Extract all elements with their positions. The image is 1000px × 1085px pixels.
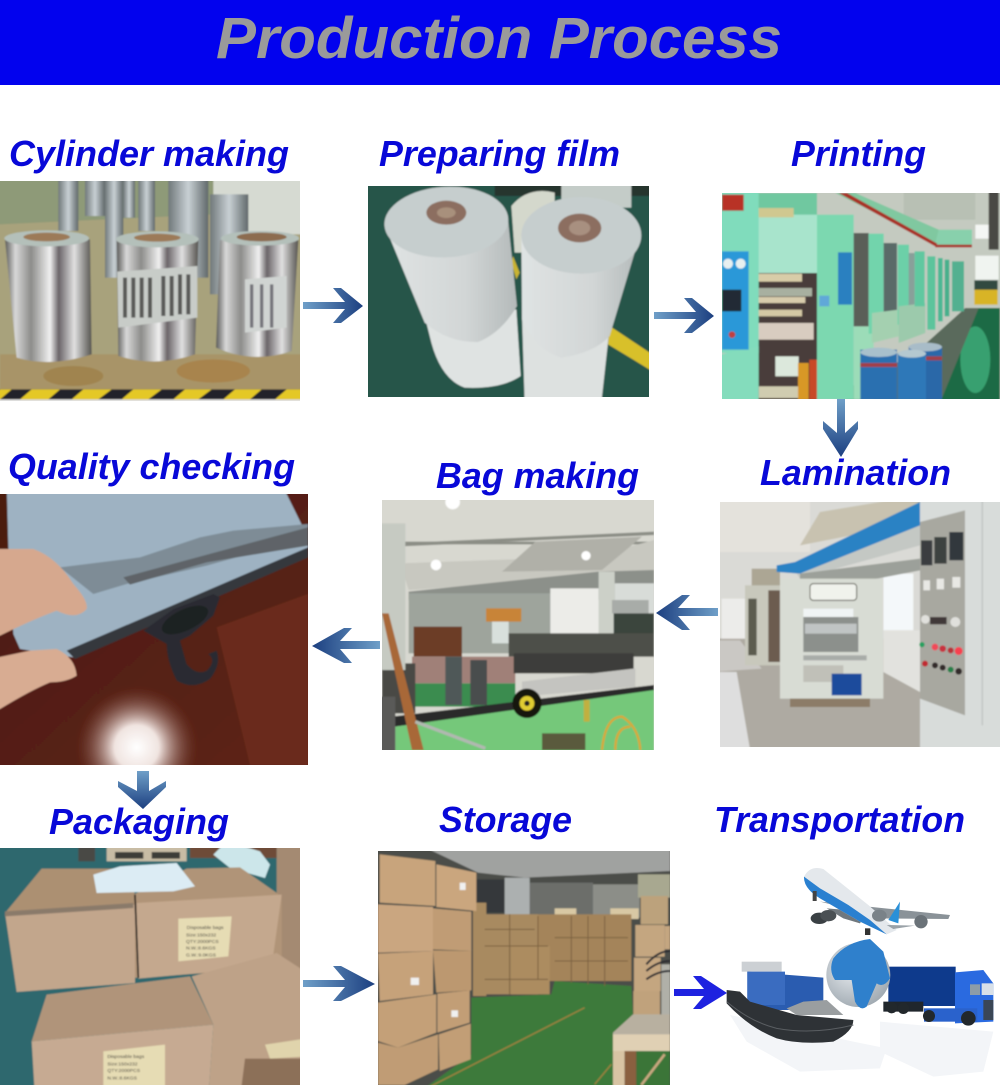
photo: storage (378, 851, 670, 1085)
photo: preparing film (368, 186, 649, 397)
arrow: lamination to bag making (656, 595, 718, 630)
photo: packaging (0, 838, 310, 1085)
arrow: quality checking to packaging (118, 771, 166, 809)
photo: packaging: N.W.:8.6KGS (186, 946, 216, 952)
icon: airplane (804, 868, 950, 935)
arrow: bag making to quality checking (312, 628, 380, 663)
heading: Cylinder making: Cylinder making (9, 133, 289, 174)
photo: packaging: QTY:2000PCS (186, 939, 219, 945)
photo: quality checking (0, 494, 308, 765)
arrow: film to printing (654, 298, 714, 333)
heading: Quality checking: Quality checking (8, 446, 295, 487)
title banner (0, 0, 1000, 85)
photo: bag making (382, 500, 654, 750)
heading: Bag making: Bag making (436, 455, 639, 496)
title banner: Production Process (216, 6, 782, 71)
photo: packaging: Size:150x232 (186, 932, 216, 938)
heading: Transportation: Transportation (714, 799, 965, 840)
heading: Preparing film: Preparing film (379, 133, 620, 174)
photo: packaging: N.W.:8.6KGS (107, 1075, 138, 1081)
photo: packaging: G.W.:9.0KGS (186, 952, 217, 958)
heading: Packaging: Packaging (49, 801, 229, 842)
heading: Storage: Storage (439, 799, 572, 840)
heading: Printing: Printing (791, 133, 926, 174)
icon: cargo ship (727, 962, 853, 1043)
heading: Lamination: Lamination (760, 452, 951, 493)
photo: packaging: Disposable bags (187, 925, 224, 931)
photo: printing (722, 193, 1000, 399)
photo: lamination (720, 502, 1000, 747)
arrow: storage to transportation (674, 976, 727, 1009)
photo: packaging: Size:150x232 (107, 1061, 138, 1067)
arrow: cylinder to film (303, 288, 363, 323)
illustration: transportation (727, 868, 993, 1077)
photo: packaging: QTY:2000PCS (107, 1068, 141, 1074)
reflection (730, 1015, 993, 1077)
photo: cylinder making (0, 181, 300, 401)
arrow: packaging to storage (303, 966, 375, 1001)
photo: packaging: Disposable bags (107, 1054, 145, 1060)
icon: globe (826, 939, 890, 1008)
arrow: printing to lamination (823, 399, 858, 457)
icon: truck (883, 967, 993, 1026)
